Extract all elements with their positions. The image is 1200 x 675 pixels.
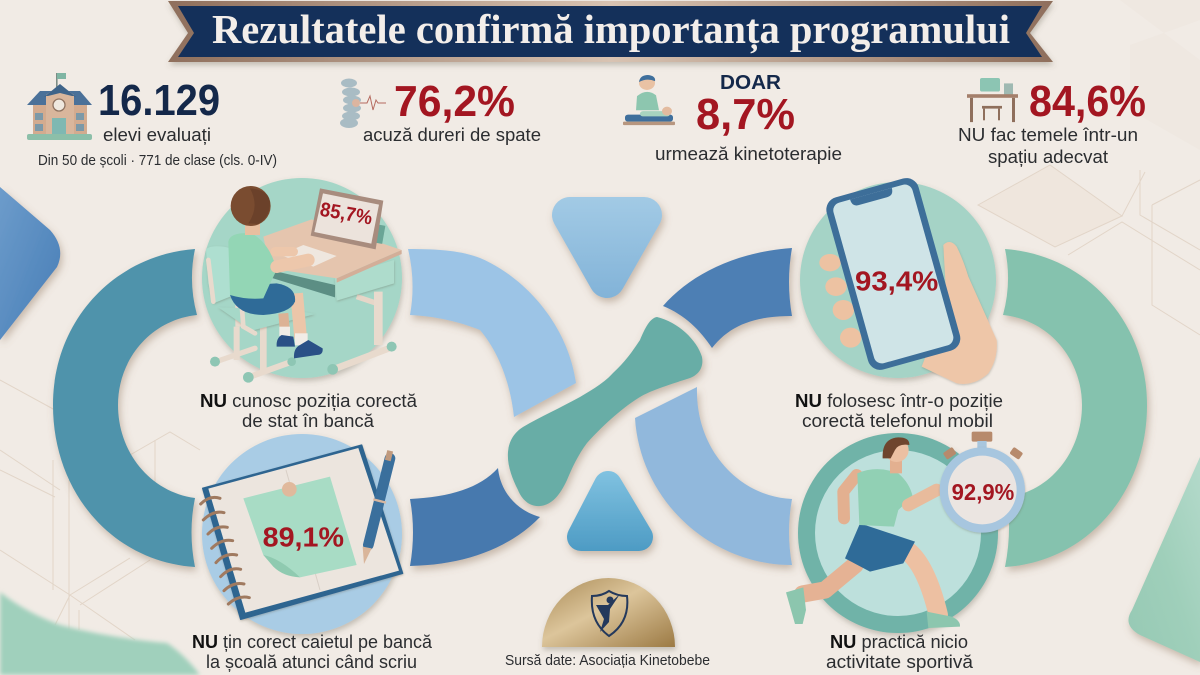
sub caption: Din 50 de școli · 771 de clase (cls. 0-IV) xyxy=(38,153,277,169)
caption: urmează kinetoterapie xyxy=(655,143,842,164)
triangle top xyxy=(570,215,644,280)
segment: dark blue upper arc xyxy=(663,248,792,348)
caption: acuză dureri de spate xyxy=(363,124,541,145)
inner circle xyxy=(815,450,981,616)
label: DOAR xyxy=(720,72,782,94)
illustration: child at desk xyxy=(206,186,402,383)
caption second line: activitate sportivă xyxy=(826,651,974,672)
illustration: runner: 92,9% xyxy=(952,479,1014,505)
stat: homework space xyxy=(958,77,1146,167)
circle xyxy=(800,182,996,378)
caption: NU țin corect caietul pe bancă xyxy=(192,631,433,652)
number: 8,7% xyxy=(696,90,795,139)
segment: center teal link xyxy=(508,317,702,506)
icon: therapist xyxy=(623,75,675,125)
stat: kinetotherapy xyxy=(623,72,842,164)
caption: NU practică nicio xyxy=(830,631,968,652)
caption: NU fac temele într-un xyxy=(958,124,1138,145)
segment: dark blue lower arc xyxy=(410,468,540,566)
source text: Sursă date: Asociația Kinetobebe xyxy=(505,653,710,669)
icon: spine xyxy=(340,78,386,128)
panel: notebook posture xyxy=(192,434,433,672)
title: Rezultatele confirmă importanța programului xyxy=(212,6,1010,53)
segment: light blue upper arc xyxy=(408,249,576,417)
decorative green shape bottom right xyxy=(1128,457,1200,662)
outer ring xyxy=(798,433,998,633)
triangle bottom xyxy=(581,485,639,537)
stat: students xyxy=(27,73,277,169)
caption second line: spațiu adecvat xyxy=(988,146,1108,167)
segment: right green arc xyxy=(1003,249,1147,567)
icon: desk xyxy=(967,78,1018,122)
number: 76,2% xyxy=(394,77,515,126)
number: 16.129 xyxy=(98,76,220,125)
illustration: runner xyxy=(786,432,1025,628)
caption second line: corectă telefonul mobil xyxy=(802,410,993,431)
caption: NU cunosc poziția corectă xyxy=(200,390,418,411)
illustration: hand with phone xyxy=(819,175,997,384)
infinity ribbon segments xyxy=(53,215,1147,567)
segment: left teal arc xyxy=(53,249,197,567)
caption: elevi evaluați xyxy=(103,124,211,145)
panel: sports activity xyxy=(786,432,1025,672)
number: 84,6% xyxy=(1029,77,1146,126)
logo: gold semicircle with shield xyxy=(542,578,675,647)
title banner xyxy=(168,1,1053,62)
illustration: notebook and pen xyxy=(201,445,403,619)
circle xyxy=(202,434,402,634)
source block xyxy=(505,578,710,669)
panel: desk posture xyxy=(200,178,418,431)
segment: light blue lower arc xyxy=(635,387,792,565)
illustration: hand with phone: 93,4% xyxy=(855,266,938,297)
stat: back pain xyxy=(340,77,541,145)
caption second line: de stat în bancă xyxy=(242,410,375,431)
circle xyxy=(202,178,402,378)
icon: school xyxy=(27,73,92,140)
decorative blue shape left xyxy=(0,187,60,340)
caption second line: la școală atunci când scriu xyxy=(206,651,417,672)
illustration: child at desk: 85,7% xyxy=(318,199,374,230)
panel: phone posture xyxy=(795,175,1003,431)
illustration: notebook and pen: 89,1% xyxy=(263,522,344,553)
decorative green shape bottom left xyxy=(0,592,200,675)
caption: NU folosesc într-o poziție xyxy=(795,390,1003,411)
